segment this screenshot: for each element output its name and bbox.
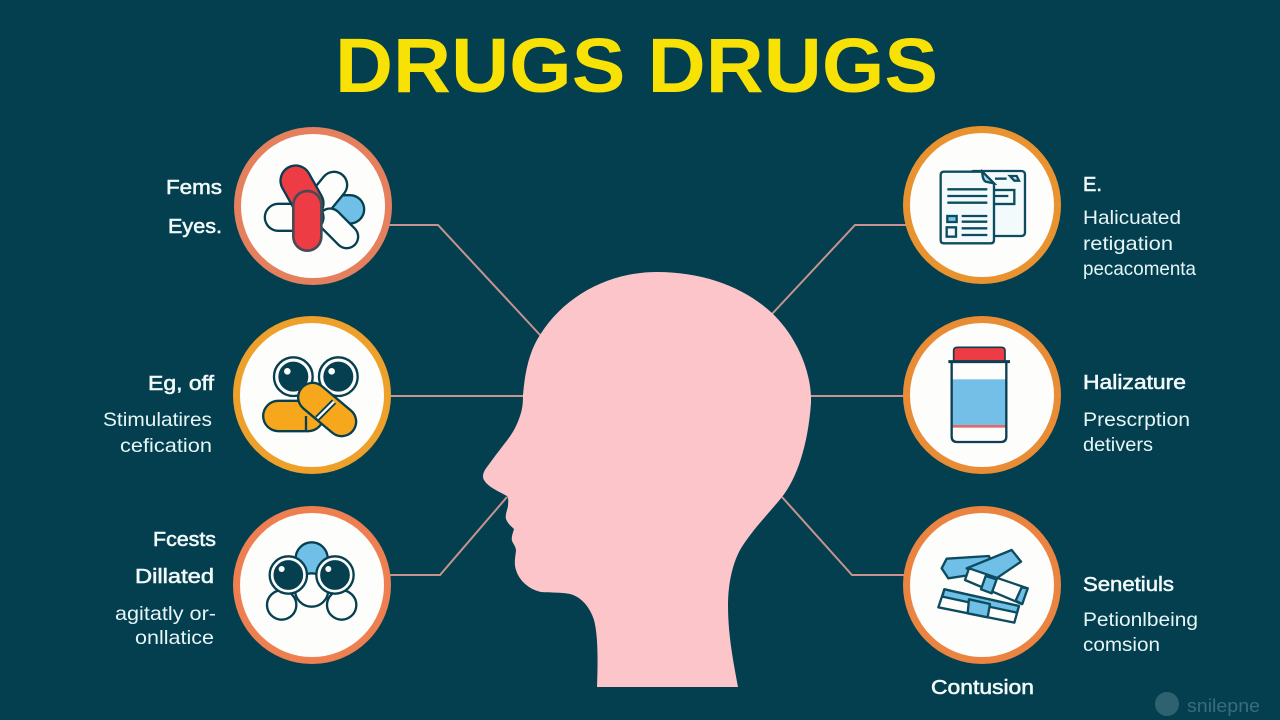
text: top-right labels: E. [1083, 174, 1102, 196]
text: bottom-left labels: Dillated [135, 566, 214, 588]
panel: top-right documents [906, 130, 1058, 280]
icon: strips [938, 550, 1028, 623]
panel: top-left pills [238, 130, 388, 282]
text: middle-right labels: Halizature [1083, 372, 1186, 394]
text: bottom-right labels [1083, 574, 1198, 656]
text: middle-left labels: cefication [120, 435, 212, 457]
circle: middle-right badge [906, 320, 1058, 470]
text: bottom-right labels: comsion [1083, 634, 1160, 656]
icon: watermark logo [1155, 692, 1179, 716]
text: top-left labels: Eyes. [168, 216, 222, 238]
text: top-right labels: Halicuated [1083, 207, 1181, 229]
circle: top-right badge [906, 130, 1058, 280]
text: middle-left labels: Eg, off [148, 373, 215, 395]
text: top-right labels: retigation [1083, 233, 1173, 255]
icon: eyes and capsules [274, 357, 358, 430]
title: DRUGS DRUGS [335, 23, 938, 109]
text: bottom label: Contusion [931, 677, 1034, 699]
text: top-right labels: pecacomenta [1083, 258, 1196, 280]
text: middle-right labels [1083, 372, 1190, 456]
text: bottom-right labels: Senetiuls [1083, 574, 1174, 596]
text: middle-left labels: Stimulatires [103, 409, 212, 431]
icon: pill bottle [948, 347, 1010, 442]
text: bottom-left labels: onllatice [135, 627, 214, 649]
text: top-right labels [1083, 174, 1196, 280]
watermark text: snilepne [1187, 696, 1260, 716]
text: middle-right labels: Prescrption [1083, 409, 1190, 431]
text: top-left labels: Fems [166, 177, 222, 199]
text: bottom-left labels: Fcests [153, 529, 216, 551]
panel: bottom-right blister strips [906, 510, 1058, 660]
text: bottom-right labels: Petionlbeing [1083, 609, 1198, 631]
text: top-left labels [166, 177, 222, 238]
circle: middle-left badge [236, 320, 388, 470]
text: middle-right labels: detivers [1083, 434, 1153, 456]
text: middle-left labels [103, 373, 215, 457]
head silhouette [483, 272, 811, 687]
circle: bottom-left badge [236, 510, 388, 660]
icon: documents [941, 171, 1025, 243]
panel: middle-left eyes and pills [236, 320, 388, 470]
watermark [1155, 692, 1260, 716]
icon: eyes and spheres [267, 542, 356, 620]
text: bottom-left labels [115, 529, 216, 649]
panel: middle-right bottle [906, 320, 1058, 470]
connector lines [388, 225, 907, 575]
panel: bottom-left eyes and circles [236, 510, 388, 660]
icon: capsules [278, 181, 350, 237]
text: bottom-left labels: agitatly or- [115, 603, 216, 625]
circle: bottom-right badge [906, 510, 1058, 660]
circle: top-left badge [238, 130, 388, 282]
